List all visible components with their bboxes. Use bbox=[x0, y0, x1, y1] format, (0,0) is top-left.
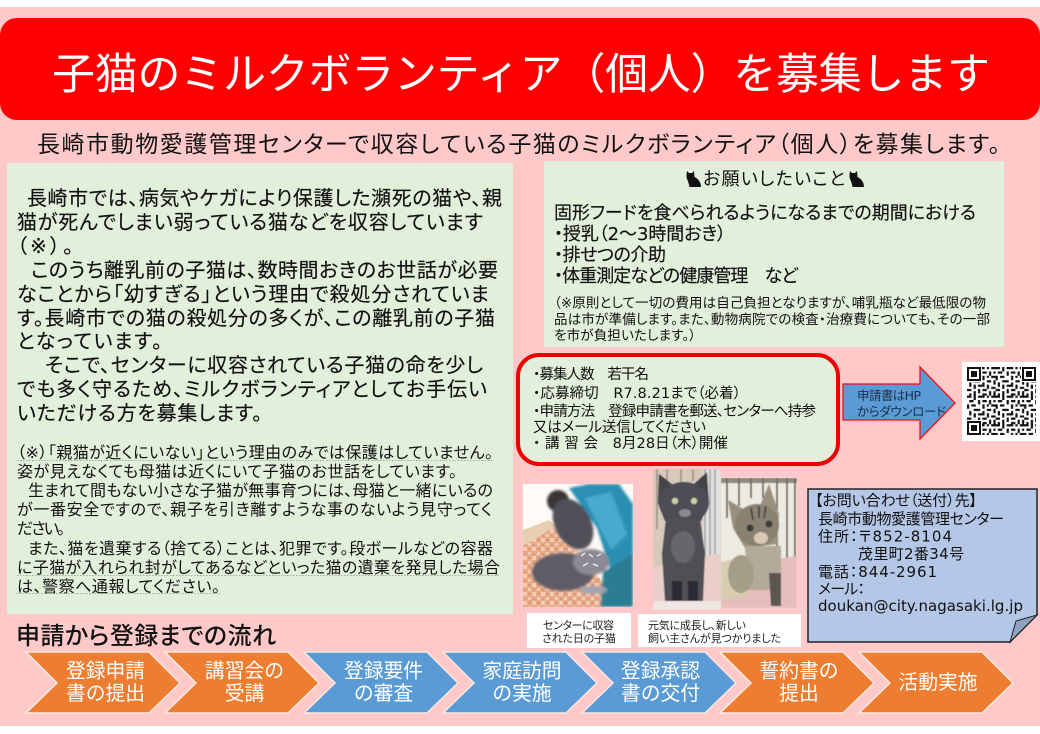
details text: ・募集人数 若干名 bbox=[533, 366, 649, 383]
footnote text: が一番安全ですので、親子を引き離すような事のないよう見守ってく bbox=[17, 500, 492, 519]
footnote text bbox=[17, 443, 500, 596]
caption: grown kittens bbox=[638, 614, 801, 647]
main explanation text bbox=[17, 186, 502, 425]
title text: 子猫のミルクボランティア（個人）を募集します bbox=[52, 50, 990, 100]
panel: recruitment details bbox=[518, 355, 838, 464]
arrow label: 申請書はHP bbox=[857, 388, 921, 403]
request list bbox=[554, 203, 976, 287]
contact text: メール： bbox=[818, 580, 865, 598]
step 3: 登録要件 bbox=[344, 660, 423, 682]
icon: cat left bbox=[687, 171, 701, 187]
step 3: の審査 bbox=[354, 682, 413, 705]
footnote text: （※）「親猫が近くにいない」という理由のみでは保護はしていません。 bbox=[17, 443, 493, 462]
heading: please help with: お願いしたいこと bbox=[703, 169, 845, 190]
footnote text: 生まれて間もない小さな子猫が無事育つには、母猫と一緒にいるの bbox=[28, 481, 493, 500]
main explanation text: す。長崎市での猫の殺処分の多くが、この離乳前の子猫 bbox=[17, 306, 495, 330]
details text: ・申請方法 登録申請書を郵送、センターへ持参 bbox=[533, 403, 816, 420]
main explanation text: となっています。 bbox=[17, 329, 162, 353]
step 1: 書の提出 bbox=[66, 682, 145, 705]
step 2: 受講 bbox=[225, 682, 264, 705]
step 3 bbox=[304, 652, 458, 713]
footnote text: に子猫が入れられ封がしてあるなどといった猫の遺棄を発見した場合 bbox=[17, 558, 500, 577]
caption: rescued kittens: センターに収容 bbox=[543, 619, 614, 632]
step 1: 登録申請 bbox=[66, 660, 145, 682]
main explanation text: いただける方を募集します。 bbox=[17, 401, 262, 425]
request list: ・授乳（2～3時間おき） bbox=[554, 224, 726, 245]
details text: 又はメール送信してください bbox=[533, 419, 706, 436]
step 7 bbox=[859, 652, 1013, 713]
step 6: 提出 bbox=[779, 682, 819, 705]
flow chart bbox=[26, 652, 1013, 713]
main explanation text: なことから「幼すぎる」という理由で殺処分されていま bbox=[17, 282, 489, 306]
title banner bbox=[0, 18, 1040, 120]
QR code bbox=[962, 362, 1040, 441]
step 4: 家庭訪問 bbox=[482, 660, 562, 682]
caption: grown kittens: 飼い主さんが見つかりました bbox=[648, 631, 781, 645]
main explanation text: 猫が死んでしまい弱っている猫などを収容しています bbox=[17, 210, 483, 234]
cost note: （※原則として一切の費用は自己負担となりますが、哺乳瓶など最低限の物 bbox=[554, 296, 986, 312]
details text bbox=[533, 366, 816, 452]
subtitle: 長崎市動物愛護管理センターで収容している子猫のミルクボランティア（個人）を募集します。 bbox=[37, 132, 1000, 158]
step 5: 書の交付 bbox=[621, 682, 700, 705]
caption: rescued kittens bbox=[527, 613, 631, 648]
icon: cat right bbox=[850, 171, 864, 187]
cost note: を市が負担いたします。） bbox=[554, 328, 696, 344]
caption: grown kittens: 元気に成長し、新しい bbox=[648, 618, 746, 632]
cost note bbox=[554, 296, 990, 344]
kitten markings bbox=[581, 553, 601, 566]
footnote text: 姿が見えなくても母猫は近くにいて子猫のお世話をしています。 bbox=[17, 462, 457, 481]
main explanation text: 長崎市では、病気やケガにより保護した瀕死の猫や、親 bbox=[27, 186, 502, 210]
step 6: 誓約書の bbox=[759, 660, 839, 682]
request list: ・排せつの介助 bbox=[554, 245, 666, 266]
footnote text: は、警察へ通報してください。 bbox=[17, 577, 220, 596]
photo: black kitten bbox=[653, 469, 721, 610]
step 2: 講習会の bbox=[205, 660, 284, 682]
details text: ・応募締切 R7.8.21まで（必着） bbox=[533, 385, 741, 402]
arrow label bbox=[857, 388, 946, 419]
panel: background explanation bbox=[7, 163, 513, 614]
main explanation text: このうち離乳前の子猫は、数時間おきのお世話が必要 bbox=[31, 258, 498, 282]
photo: rescued kittens bbox=[523, 484, 633, 607]
contact text: 電話：844-2961 bbox=[818, 563, 937, 581]
footnote text: ださい。 bbox=[17, 519, 65, 538]
contact text: doukan@city.nagasaki.lg.jp bbox=[818, 597, 1023, 615]
photo: tabby kitten bbox=[721, 478, 797, 608]
contact text bbox=[815, 492, 1023, 615]
step 4 bbox=[443, 652, 597, 713]
main explanation text: そこで、センターに収容されている子猫の命を少し bbox=[45, 353, 483, 377]
main explanation text: （※）。 bbox=[17, 234, 73, 258]
heading: flow from application to registration: 申請から登録までの流れ bbox=[16, 622, 276, 650]
details text: ・ 講 習 会 8月28日（木）開催 bbox=[533, 435, 728, 452]
main explanation text: でも多く守るため、ミルクボランティアとしてお手伝い bbox=[17, 377, 487, 401]
step 5 bbox=[582, 652, 736, 713]
step 4: の実施 bbox=[492, 682, 552, 705]
contact text: 住所：〒852-8104 bbox=[818, 528, 952, 546]
step 7: 活動実施 bbox=[898, 671, 978, 694]
request list: 固形フードを食べられるようになるまでの期間における bbox=[554, 203, 976, 224]
step 5: 登録承認 bbox=[621, 660, 700, 682]
cost note: 品は市が準備します。また、動物病院での検査・治療費についても、その一部 bbox=[554, 312, 990, 328]
footnote text: また、猫を遺棄する（捨てる）ことは、犯罪です。段ボールなどの容器 bbox=[28, 539, 493, 558]
arrow label: からダウンロード bbox=[857, 404, 946, 419]
request list: ・体重測定などの健康管理 など bbox=[554, 266, 799, 287]
step 2 bbox=[165, 652, 319, 713]
folded corner bbox=[1010, 615, 1037, 642]
caption: rescued kittens: された日の子猫 bbox=[542, 632, 616, 645]
arrow: download application form bbox=[843, 367, 955, 439]
step 6 bbox=[720, 652, 874, 713]
panel: contact note bbox=[808, 489, 1037, 642]
step 1 bbox=[26, 652, 180, 713]
contact text: 【お問い合わせ（送付）先】 bbox=[815, 492, 977, 510]
panel: what we ask of volunteers bbox=[544, 161, 1004, 347]
contact text: 長崎市動物愛護管理センター bbox=[818, 510, 1004, 528]
contact text: 茂里町2番34号 bbox=[858, 545, 964, 563]
